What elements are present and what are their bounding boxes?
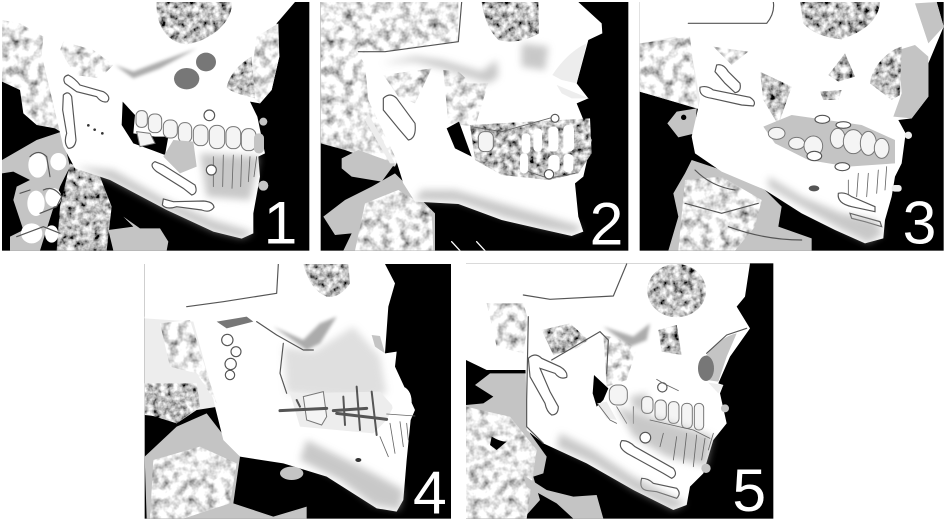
panel: CT scan 3 — [640, 2, 944, 256]
mouth gap 1 — [122, 102, 168, 155]
teeth and wires 4 — [280, 387, 415, 435]
orbit 3 — [800, 2, 880, 39]
cranial outline 3 — [688, 2, 774, 23]
number 2: 2 — [590, 189, 623, 257]
styloid 2 — [365, 113, 395, 163]
spine and back of skull 1 — [2, 20, 168, 251]
skull and mandible bone 2 — [358, 2, 602, 236]
skull and mandible bone 4 — [145, 264, 415, 512]
temporal fossa 3 — [713, 47, 748, 65]
skull and mandible bone 1 — [2, 2, 295, 239]
zygoma shadow 4 — [273, 317, 337, 350]
condyle plate 2 — [383, 95, 415, 140]
number 5: 5 — [732, 456, 766, 522]
mandible shading 1 — [77, 167, 253, 239]
nasal foramen 5 — [658, 325, 682, 355]
plates 5 — [528, 355, 679, 498]
spine and back of skull 3 — [640, 2, 812, 251]
orbit 4 — [303, 264, 350, 297]
sinus recess 2 — [443, 70, 488, 127]
nasal contour 5 — [707, 328, 747, 353]
maxilla shading 2 — [522, 43, 548, 70]
ramus contour 5 — [527, 317, 608, 443]
screw holes 1 — [87, 124, 104, 135]
teeth block 3 — [763, 115, 895, 197]
number 3: 3 — [903, 188, 936, 256]
temporal bone shading 1 — [60, 42, 113, 78]
orbit 2 — [482, 2, 539, 41]
temporal condyle detail 4 — [160, 320, 217, 403]
mandible shading 5 — [557, 433, 687, 510]
nasal aperture rim 4 — [372, 335, 385, 353]
cranial outline 4 — [187, 264, 278, 307]
skull and mandible bone 5 — [466, 263, 750, 510]
screws 1 — [258, 118, 268, 191]
fixation plates 1 — [63, 75, 216, 211]
nasal aperture 2 — [552, 43, 587, 83]
temporal fossa 5 — [542, 323, 588, 355]
sinus recess 3 — [760, 72, 792, 125]
spine and back of skull 4 — [145, 317, 307, 519]
upper teeth 5 — [609, 385, 704, 430]
mouth gap 2 — [447, 122, 472, 157]
panel: CT scan 5 — [466, 263, 773, 522]
orbit 5 — [647, 264, 706, 317]
plate screws 4 — [222, 334, 241, 380]
right rim 3 — [915, 2, 944, 43]
panel: CT scan 2 — [321, 2, 628, 257]
skull and mandible bone 3 — [640, 2, 944, 243]
nasal cavity dark 5 — [698, 356, 714, 381]
upper teeth 1 — [136, 111, 264, 153]
lower teeth 5 — [597, 402, 713, 467]
cranial outline 5 — [523, 264, 627, 299]
zygoma shadow 1 — [115, 48, 197, 78]
articular fossa 4 — [217, 317, 253, 328]
plates 3 — [700, 65, 882, 227]
cranial outline 2 — [358, 2, 462, 52]
orbit 1 — [157, 2, 232, 44]
zygoma contour 4 — [257, 322, 313, 393]
back skull shading 3 — [640, 37, 698, 108]
panel: CT scan 4 — [145, 264, 451, 522]
maxillary foramina 1 — [174, 53, 216, 89]
mandible shading 2 — [415, 190, 582, 233]
foramen patches 3 — [820, 53, 855, 100]
screws 3 — [892, 132, 912, 192]
panel: CT scan 1 — [2, 2, 309, 256]
mandible shading 3 — [768, 177, 883, 243]
back skull shading 5 — [487, 303, 528, 353]
nasal aperture 5 — [698, 333, 737, 382]
lower teeth 1 — [137, 132, 260, 200]
temporal region 2 — [383, 68, 432, 103]
infratemporal recess 5 — [603, 335, 637, 387]
screw spikes 2 — [557, 85, 589, 98]
spine and back of skull 5 — [466, 263, 603, 519]
teeth block 2 — [470, 114, 592, 180]
mouth gap 5 — [593, 375, 608, 407]
mental foramen 4 — [355, 458, 361, 462]
maxilla shading 4 — [283, 327, 387, 400]
mental foramen 3 — [809, 185, 819, 191]
nasal aperture 3 — [870, 47, 902, 100]
lower teeth roots 4 — [380, 422, 408, 457]
nasal rim 3 — [893, 45, 928, 118]
screws 5 — [701, 383, 729, 473]
zygoma shadow 5 — [603, 323, 650, 347]
mandible shading 4 — [300, 440, 403, 510]
nasal aperture 1 — [227, 57, 255, 98]
nasal rim texture 1 — [252, 23, 279, 103]
number 1: 1 — [264, 188, 297, 256]
spine and back of skull 2 — [321, 2, 485, 251]
zygoma shadow 2 — [382, 57, 498, 83]
maxilla screw 5 — [657, 379, 678, 392]
